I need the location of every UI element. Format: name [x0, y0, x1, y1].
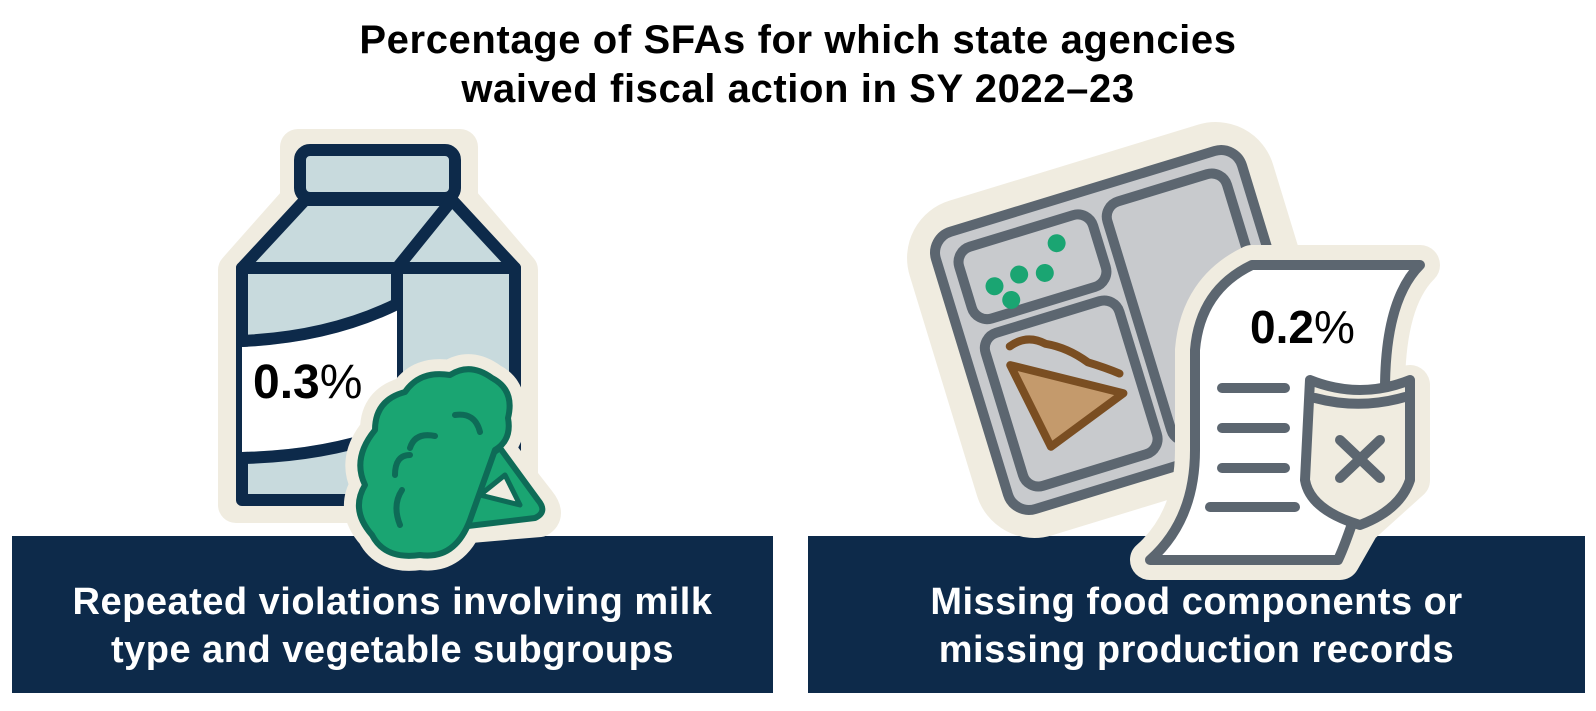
head — [359, 369, 510, 556]
halo — [470, 455, 546, 528]
icon: lunch tray — [917, 132, 1333, 528]
title: waived fiscal action in SY 2022–23 — [461, 67, 1135, 111]
banner: milk: type and vegetable subgroups — [111, 628, 674, 670]
label: 0.3%: 0.3% — [253, 356, 362, 409]
icon: receipt — [1150, 265, 1420, 560]
banner: milk — [12, 536, 773, 693]
peas — [977, 232, 1080, 315]
stem — [468, 448, 542, 526]
icon: broccoli — [359, 369, 546, 556]
sandwich — [1010, 336, 1132, 451]
banner: records: missing production records — [939, 628, 1454, 670]
title: Percentage of SFAs for which state agencies — [359, 18, 1237, 62]
title — [359, 18, 1237, 111]
banner: records — [808, 536, 1585, 693]
icon: milk carton — [236, 147, 520, 505]
banner: milk: Repeated violations involving milk — [73, 580, 712, 622]
shield — [1305, 380, 1410, 525]
label: 0.2%: 0.2% — [1250, 301, 1355, 353]
banner: records: Missing food components or — [930, 580, 1463, 622]
